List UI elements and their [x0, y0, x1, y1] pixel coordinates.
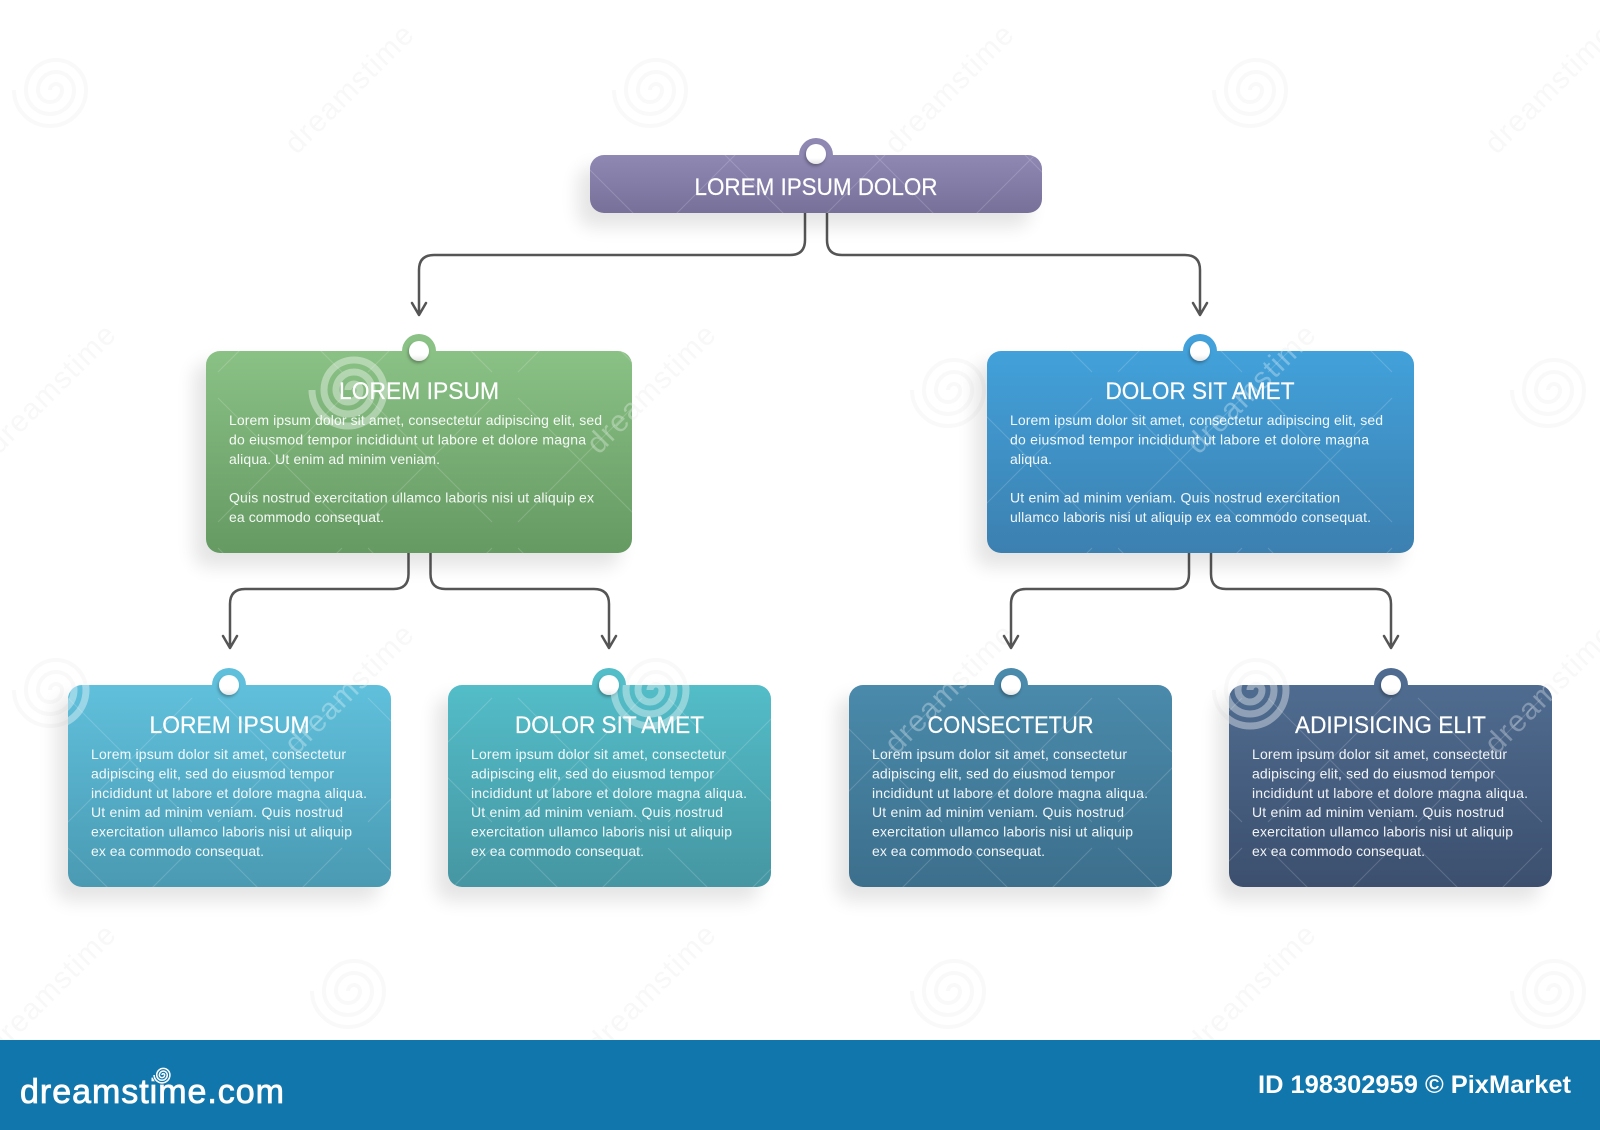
text: light blue box body: exercitation ullamco laboris nisi ut aliquip — [91, 824, 352, 840]
text: steel box body: exercitation ullamco laboris nisi ut aliquip — [872, 824, 1133, 840]
watermark over boxes: dreamstime — [580, 318, 722, 460]
text: navy box body: ex ea commodo consequat. — [1252, 843, 1425, 859]
text: green box body — [229, 412, 602, 525]
icon: logo spiral — [152, 1066, 172, 1084]
text: green box body: aliqua. Ut enim ad minim veniam. — [229, 451, 440, 467]
heading: steel box: CONSECTETUR — [928, 712, 1094, 739]
text: green box body: do eiusmod tempor incididunt ut labore et dolore magna — [229, 431, 586, 447]
connectors: green box to children — [223, 553, 616, 648]
watermark on background: dreamstime — [580, 918, 722, 1060]
watermark over boxes: dreamstime — [878, 618, 1020, 760]
text: steel box body: adipiscing elit, sed do eiusmod tempor — [872, 765, 1115, 781]
watermark over boxes — [68, 351, 1552, 752]
arrow: green box to teal box — [430, 553, 616, 648]
panel: navy box — [1217, 668, 1552, 901]
watermark on background: dreamstime — [580, 318, 722, 460]
text: steel box body — [872, 746, 1148, 859]
text: blue box body: Ut enim ad minim veniam. Quis nostrud exercitation — [1010, 490, 1340, 506]
text: light blue box body: Lorem ipsum dolor sit amet, consectetur — [91, 746, 346, 762]
text: light blue box body: Ut enim ad minim veniam. Quis nostrud — [91, 804, 343, 820]
text: navy box body: Lorem ipsum dolor sit amet, consectetur — [1252, 746, 1507, 762]
panel: blue box — [975, 334, 1414, 567]
text: blue box body: aliqua. — [1010, 451, 1052, 467]
heading: green box: LOREM IPSUM — [339, 378, 499, 405]
heading: light blue box: LOREM IPSUM — [150, 712, 310, 739]
footer logo: dreamstime.com — [20, 1073, 284, 1111]
text: blue box body: Lorem ipsum dolor sit amet, consectetur adipiscing elit, sed — [1010, 412, 1383, 428]
footer band — [0, 1040, 1600, 1130]
text: green box body: Quis nostrud exercitation ullamco laboris nisi ut aliquip ex — [229, 490, 594, 506]
watermark on background: dreamstime — [278, 18, 420, 160]
text: steel box body: Ut enim ad minim veniam. Quis nostrud — [872, 804, 1124, 820]
heading: root: LOREM IPSUM DOLOR — [694, 174, 938, 201]
text: light blue box body: incididunt ut labore et dolore magna aliqua. — [91, 785, 367, 801]
text: steel box body: incididunt ut labore et dolore magna aliqua. — [872, 785, 1148, 801]
panel: light blue box — [56, 668, 391, 901]
watermark over boxes: dreamstime — [278, 618, 420, 760]
text: navy box body — [1252, 746, 1528, 859]
watermark on background: dreamstime — [278, 618, 420, 760]
text: teal box body — [471, 746, 747, 859]
arrow: blue box to steel box — [1004, 553, 1189, 648]
panel: root box — [578, 138, 1042, 227]
watermark on background: dreamstime — [878, 18, 1020, 160]
watermark on background: dreamstime — [878, 618, 1020, 760]
watermark over boxes: dreamstime — [1180, 318, 1322, 460]
heading: teal box: DOLOR SIT AMET — [515, 712, 704, 739]
text: navy box body: adipiscing elit, sed do eiusmod tempor — [1252, 765, 1495, 781]
footer credit: ID 198302959 © PixMarket — [1258, 1071, 1572, 1099]
connectors: blue box to children — [1004, 553, 1398, 648]
text: teal box body: adipiscing elit, sed do eiusmod tempor — [471, 765, 714, 781]
panel: green box — [194, 334, 632, 567]
text: blue box body — [1010, 412, 1383, 525]
arrow: blue box to navy box — [1211, 553, 1398, 648]
text: light blue box body — [91, 746, 367, 859]
arrow: root to blue box — [827, 213, 1207, 315]
text: green box body: Lorem ipsum dolor sit amet, consectetur adipiscing elit, sed — [229, 412, 602, 428]
text: light blue box body: ex ea commodo consequat. — [91, 843, 264, 859]
arrow: green box to light blue box — [223, 553, 408, 648]
text: steel box body: Lorem ipsum dolor sit amet, consectetur — [872, 746, 1127, 762]
panel: steel box — [837, 668, 1172, 901]
text: teal box body: exercitation ullamco laboris nisi ut aliquip — [471, 824, 732, 840]
text: steel box body: ex ea commodo consequat. — [872, 843, 1045, 859]
heading: blue box: DOLOR SIT AMET — [1106, 378, 1295, 405]
text: teal box body: incididunt ut labore et dolore magna aliqua. — [471, 785, 747, 801]
watermark on background: dreamstime — [1180, 918, 1322, 1060]
text: blue box body: do eiusmod tempor incididunt ut labore et dolore magna — [1010, 431, 1369, 447]
text: navy box body: incididunt ut labore et dolore magna aliqua. — [1252, 785, 1528, 801]
panel: teal box — [436, 668, 771, 901]
connectors: root to level two — [412, 213, 1207, 315]
text: navy box body: exercitation ullamco laboris nisi ut aliquip — [1252, 824, 1513, 840]
text: teal box body: Lorem ipsum dolor sit amet, consectetur — [471, 746, 726, 762]
text: green box body: ea commodo consequat. — [229, 509, 384, 525]
text: teal box body: Ut enim ad minim veniam. Quis nostrud — [471, 804, 723, 820]
watermark on background: dreamstime — [1180, 318, 1322, 460]
arrow: root to green box — [412, 213, 805, 315]
text: teal box body: ex ea commodo consequat. — [471, 843, 644, 859]
text: navy box body: Ut enim ad minim veniam. Quis nostrud — [1252, 804, 1504, 820]
text: blue box body: ullamco laboris nisi ut aliquip ex ea commodo consequat. — [1010, 509, 1371, 525]
heading: navy box: ADIPISICING ELIT — [1295, 712, 1486, 739]
text: light blue box body: adipiscing elit, sed do eiusmod tempor — [91, 765, 334, 781]
